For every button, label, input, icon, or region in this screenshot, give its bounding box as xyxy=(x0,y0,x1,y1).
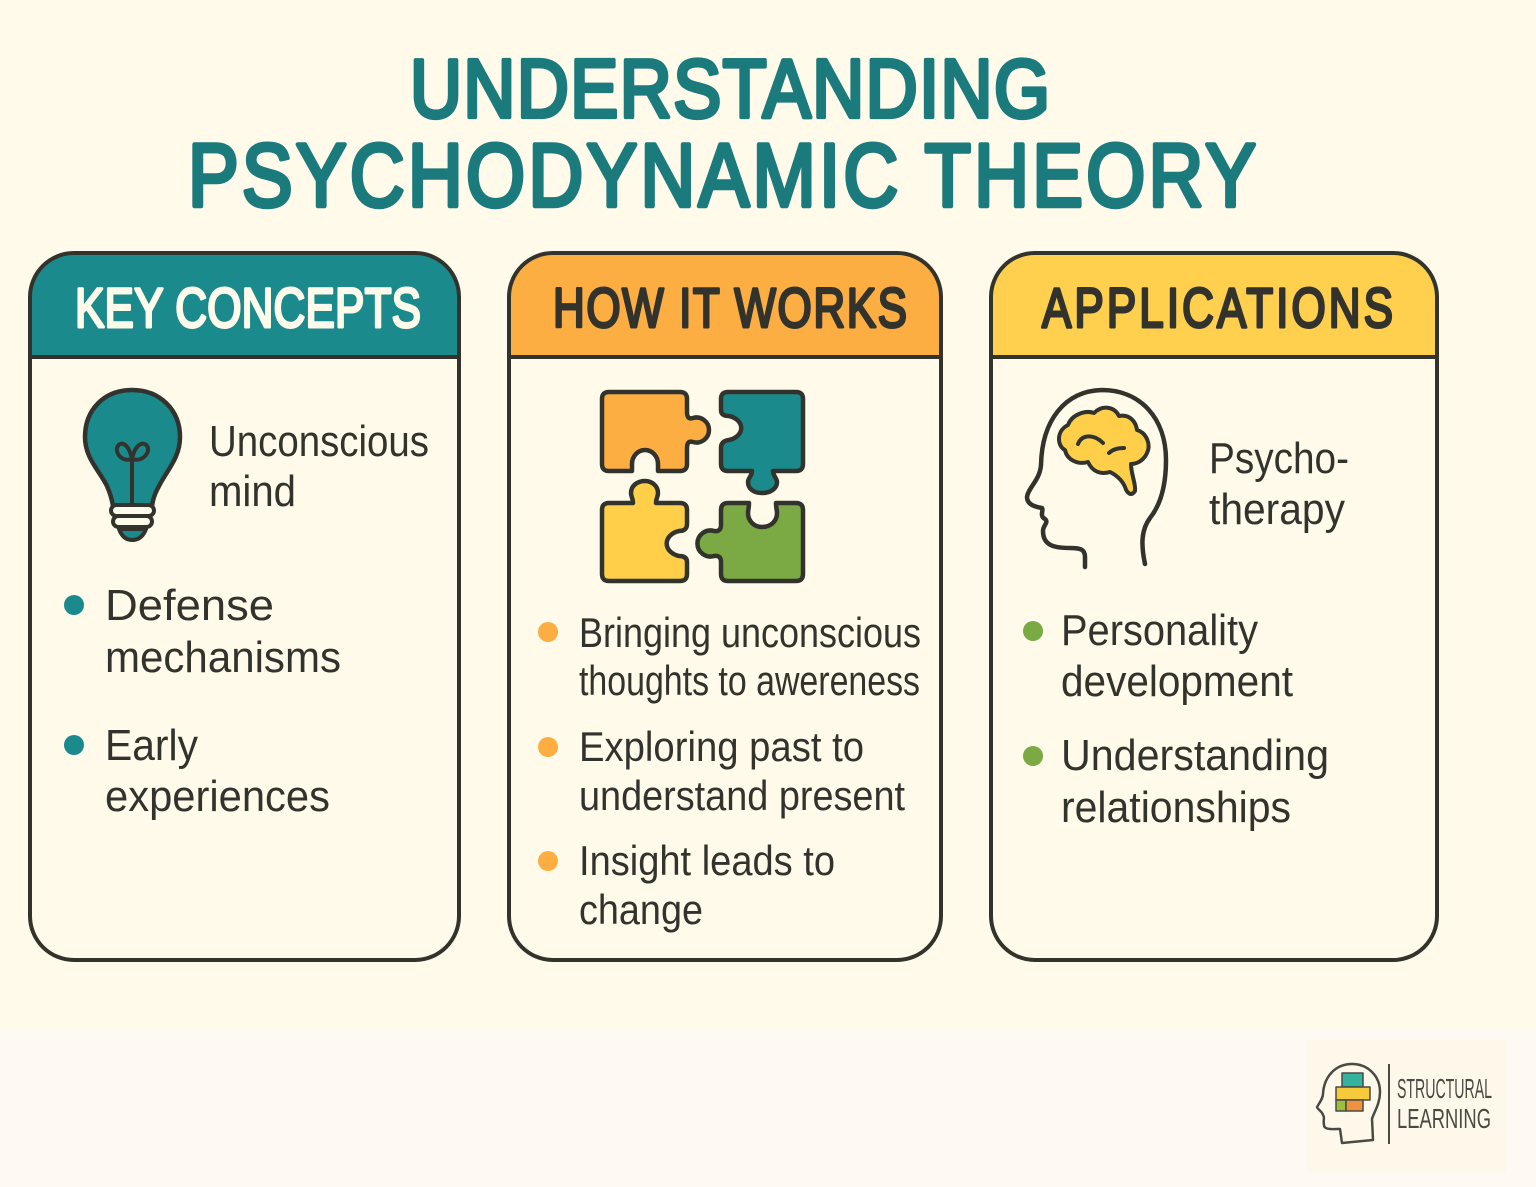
bullet: exploring past: understand present xyxy=(579,772,905,819)
text: logo wordmark: LEARNING xyxy=(1397,1103,1491,1134)
bullet: defense mechanisms xyxy=(64,581,341,682)
icon: puzzle pieces xyxy=(602,392,803,581)
bullet: bringing unconscious thoughts: thoughts to awereness xyxy=(579,657,920,704)
title: UNDERSTANDING xyxy=(410,43,1050,135)
bullet: bringing unconscious thoughts xyxy=(538,609,921,704)
bullet: early experiences: Early xyxy=(105,721,198,770)
icon: head with brain xyxy=(1027,390,1166,567)
heading: key concepts: KEY CONCEPTS xyxy=(75,276,421,339)
icon: logo head xyxy=(1317,1064,1380,1143)
bullet: understanding relationships: relationships xyxy=(1061,783,1291,832)
bullet: exploring past: Exploring past to xyxy=(579,723,864,770)
heading: applications: APPLICATIONS xyxy=(1042,276,1393,339)
panel: how it works xyxy=(509,253,941,960)
title: PSYCHODYNAMIC THEORY xyxy=(188,127,1256,225)
bullet: early experiences: experiences xyxy=(105,772,330,821)
text: unconscious mind xyxy=(209,417,429,516)
heading: how it works: HOW IT WORKS xyxy=(553,276,907,339)
text: logo wordmark xyxy=(1397,1073,1492,1134)
puzzle: yellow piece xyxy=(602,481,687,581)
bullet: early experiences xyxy=(64,721,330,821)
puzzle: orange piece xyxy=(602,392,709,471)
bullet: personality development xyxy=(1023,606,1293,706)
text: unconscious mind: Unconscious xyxy=(209,417,429,466)
bullet: insight leads to change: Insight leads to xyxy=(579,837,835,884)
title xyxy=(188,43,1256,225)
bullet: personality development: development xyxy=(1061,657,1293,706)
bullet: insight leads to change xyxy=(538,837,835,933)
bullet: defense mechanisms: Defense xyxy=(105,581,274,630)
panel: applications xyxy=(991,253,1437,960)
panel: key concepts xyxy=(30,253,459,960)
bullet: understanding relationships: Understanding xyxy=(1061,731,1329,780)
text: psychotherapy xyxy=(1209,434,1349,534)
bullet: personality development: Personality xyxy=(1061,606,1258,655)
text: unconscious mind: mind xyxy=(209,467,296,516)
text: psychotherapy: Psycho- xyxy=(1209,434,1349,483)
bullet: understanding relationships xyxy=(1023,731,1329,832)
icon: light bulb xyxy=(85,390,180,540)
puzzle: green piece xyxy=(697,503,803,581)
text: psychotherapy: therapy xyxy=(1209,485,1345,534)
bullet: exploring past xyxy=(538,723,905,819)
puzzle: teal piece xyxy=(721,392,803,493)
logo: structural learning xyxy=(1307,1040,1506,1172)
bullet: defense mechanisms: mechanisms xyxy=(105,633,341,682)
bullet: insight leads to change: change xyxy=(579,886,703,933)
bullet: bringing unconscious thoughts: Bringing unconscious xyxy=(579,609,921,656)
